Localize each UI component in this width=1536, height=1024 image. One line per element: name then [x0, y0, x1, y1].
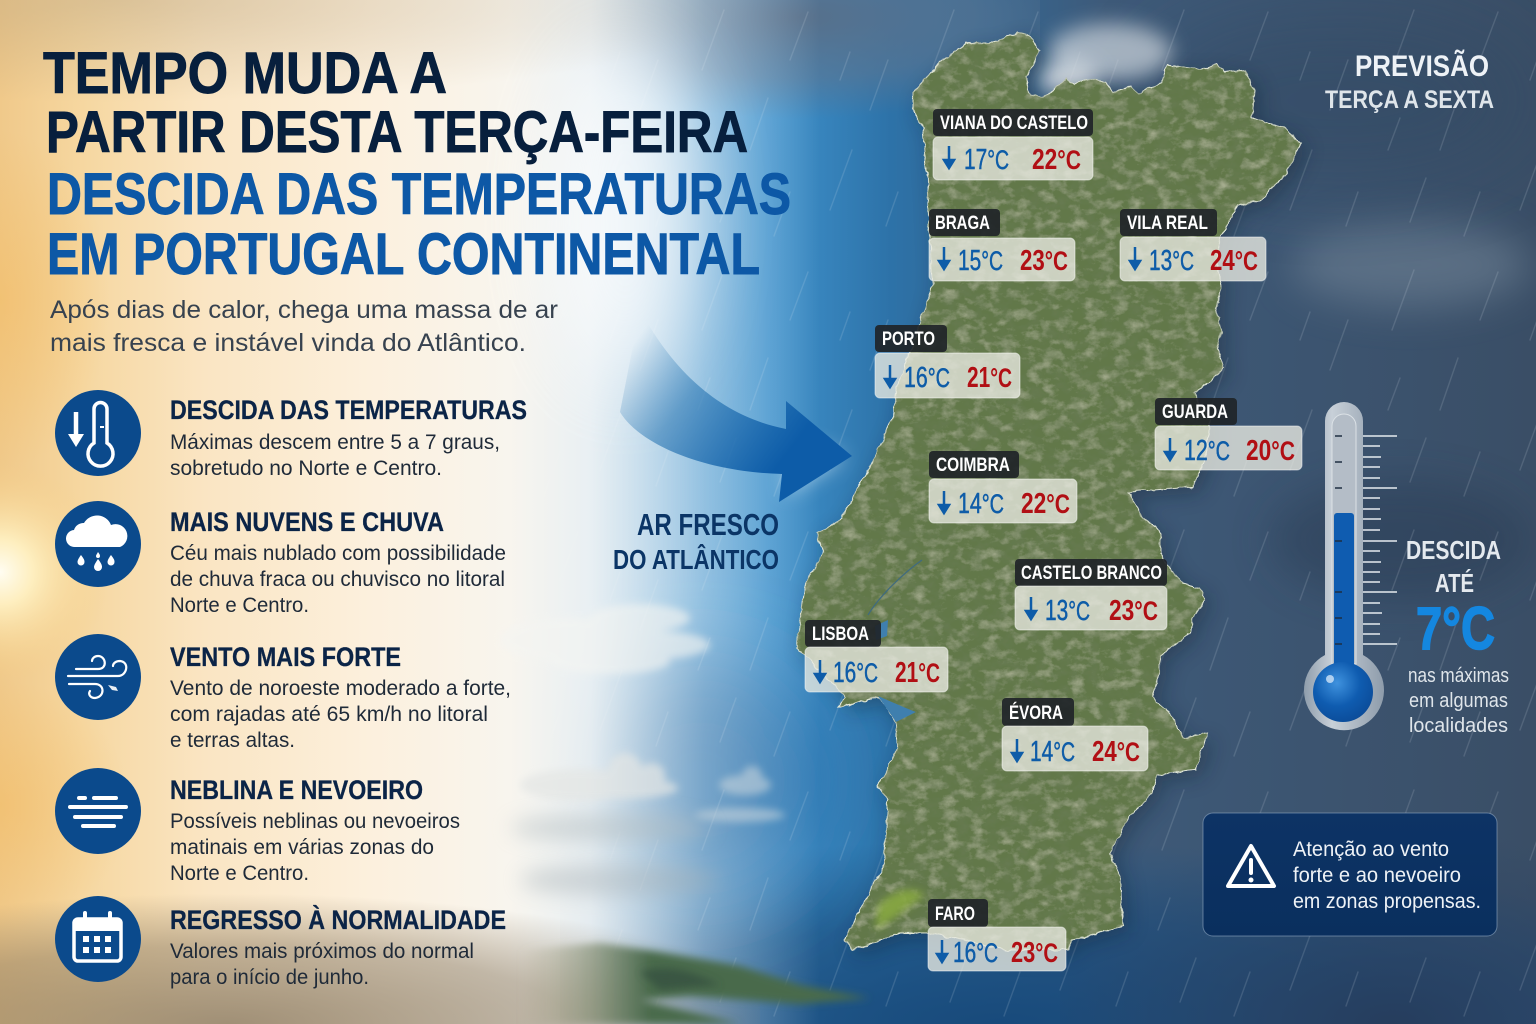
label: Coimbra [929, 451, 1077, 523]
item: neblina e nevoeiro [55, 768, 460, 885]
label: Vila Real: VILA REAL [1127, 213, 1208, 234]
label: Porto: PORTO [882, 329, 935, 350]
warning callout: Atenção ao vento [1293, 838, 1449, 861]
forecast period heading [1325, 49, 1494, 114]
label: Faro: 23°C [1011, 937, 1058, 969]
drop callout: up to 7°C: em algumas [1409, 690, 1508, 712]
icon: warning triangle [1228, 846, 1274, 886]
label: Porto [875, 325, 1020, 398]
distant coast [520, 943, 870, 1024]
warning callout [1203, 813, 1497, 936]
icon: wind [55, 634, 141, 720]
item: regresso à normalidade: REGRESSO À NORMALIDADE [170, 904, 506, 935]
warning callout: forte e ao nevoeiro [1293, 864, 1461, 887]
icon: calendar [55, 896, 141, 982]
label: Guarda: 20°C [1246, 435, 1295, 467]
item: mais nuvens e chuva: MAIS NUVENS E CHUVA [170, 507, 444, 537]
intro text: mais fresca e instável vinda do Atlântico. [50, 329, 526, 357]
item: mais nuvens e chuva [55, 501, 506, 617]
drop callout: up to 7°C: 7°C [1416, 595, 1495, 662]
label: Évora [1002, 698, 1148, 771]
item: mais nuvens e chuva: Norte e Centro. [170, 594, 309, 617]
label: Guarda: GUARDA [1162, 402, 1228, 423]
clouds over the ocean [500, 604, 785, 896]
label: Lisboa [805, 620, 948, 692]
label: Guarda: 12°C [1184, 435, 1230, 467]
label: Coimbra: 14°C [958, 488, 1004, 520]
arrow label: DO ATLÂNTICO [613, 544, 779, 575]
drop callout: up to 7°C [1406, 535, 1509, 737]
item: mais nuvens e chuva: de chuva fraca ou chuvisco no litoral [170, 568, 505, 591]
label: Vila Real [1120, 209, 1266, 281]
warning callout: em zonas propensas. [1293, 890, 1481, 913]
label: Braga: BRAGA [935, 213, 990, 234]
title: PARTIR DESTA TERÇA-FEIRA [46, 100, 748, 165]
label: Lisboa: 16°C [833, 657, 878, 689]
label: Lisboa: LISBOA [812, 624, 869, 645]
title [43, 41, 791, 287]
item: vento mais forte: e terras altas. [170, 729, 295, 752]
label: Braga [929, 209, 1075, 281]
label: Coimbra: 22°C [1021, 488, 1070, 520]
intro text [50, 296, 558, 357]
label: Castelo Branco: 13°C [1045, 595, 1090, 627]
item: regresso à normalidade: Valores mais próximos do normal [170, 940, 474, 963]
item: vento mais forte: VENTO MAIS FORTE [170, 642, 401, 672]
item: neblina e nevoeiro: Norte e Centro. [170, 862, 309, 885]
drop callout: up to 7°C: localidades [1409, 715, 1508, 737]
arrow label [613, 507, 779, 575]
item: neblina e nevoeiro: matinais em várias zonas do [170, 836, 434, 859]
label: Porto: 21°C [967, 362, 1012, 394]
item: descida das temperaturas [55, 390, 527, 480]
item: descida das temperaturas: sobretudo no Norte e Centro. [170, 457, 442, 480]
label: Viana do Castelo [933, 109, 1093, 180]
item: regresso à normalidade: para o início de junho. [170, 966, 369, 989]
item: mais nuvens e chuva: Céu mais nublado com possibilidade [170, 542, 506, 565]
label: Faro [928, 899, 1066, 971]
icon: fog lines [55, 768, 141, 854]
title: TEMPO MUDA A [43, 41, 447, 106]
intro text: Após dias de calor, chega uma massa de ar [50, 296, 558, 324]
icon: thermometer with down arrow [55, 390, 141, 476]
map of mainland Portugal [797, 32, 1307, 956]
label: Viana do Castelo: 17°C [964, 144, 1009, 176]
label: Braga: 15°C [958, 245, 1003, 277]
forecast period heading: PREVISÃO [1355, 49, 1489, 83]
item: regresso à normalidade [55, 896, 506, 989]
label: Évora: 24°C [1092, 736, 1140, 768]
icon: rain cloud [55, 501, 141, 587]
item: neblina e nevoeiro: Possíveis neblinas ou nevoeiros [170, 810, 460, 833]
item: vento mais forte: Vento de noroeste moderado a forte, [170, 677, 511, 700]
title: EM PORTUGAL CONTINENTAL [47, 222, 760, 287]
drop callout: up to 7°C: ATÉ [1435, 568, 1474, 598]
item: vento mais forte [55, 634, 511, 752]
drop callout: up to 7°C: DESCIDA [1406, 535, 1501, 565]
label: Évora: 14°C [1030, 736, 1075, 768]
cloud behind northern coast [1038, 24, 1172, 96]
label: Viana do Castelo: 22°C [1032, 144, 1081, 176]
item: descida das temperaturas: DESCIDA DAS TEMPERATURAS [170, 395, 527, 425]
label: Viana do Castelo: VIANA DO CASTELO [940, 113, 1088, 134]
label: Vila Real: 24°C [1210, 245, 1258, 277]
label: Castelo Branco: 23°C [1109, 595, 1158, 627]
label: Faro: 16°C [953, 937, 998, 969]
label: Coimbra: COIMBRA [936, 455, 1010, 476]
label: Vila Real: 13°C [1149, 245, 1194, 277]
arrow: fresh Atlantic air [620, 310, 852, 502]
label: Lisboa: 21°C [895, 657, 940, 689]
label: Braga: 23°C [1020, 245, 1068, 277]
item: neblina e nevoeiro: NEBLINA E NEVOEIRO [170, 775, 423, 805]
label: Porto: 16°C [904, 362, 950, 394]
thermometer [1304, 402, 1397, 730]
item: vento mais forte: com rajadas até 65 km/h no litoral [170, 703, 488, 726]
arrow label: AR FRESCO [637, 507, 779, 542]
label: Guarda [1155, 398, 1302, 470]
title: DESCIDA DAS TEMPERATURAS [47, 162, 791, 227]
label: Évora: ÉVORA [1009, 702, 1063, 724]
drop callout: up to 7°C: nas máximas [1408, 665, 1509, 687]
label: Castelo Branco: CASTELO BRANCO [1021, 563, 1162, 584]
label: Castelo Branco [1015, 559, 1167, 630]
label: Faro: FARO [935, 904, 975, 925]
item: descida das temperaturas: Máximas descem entre 5 a 7 graus, [170, 431, 500, 454]
forecast period heading: TERÇA A SEXTA [1325, 86, 1494, 114]
